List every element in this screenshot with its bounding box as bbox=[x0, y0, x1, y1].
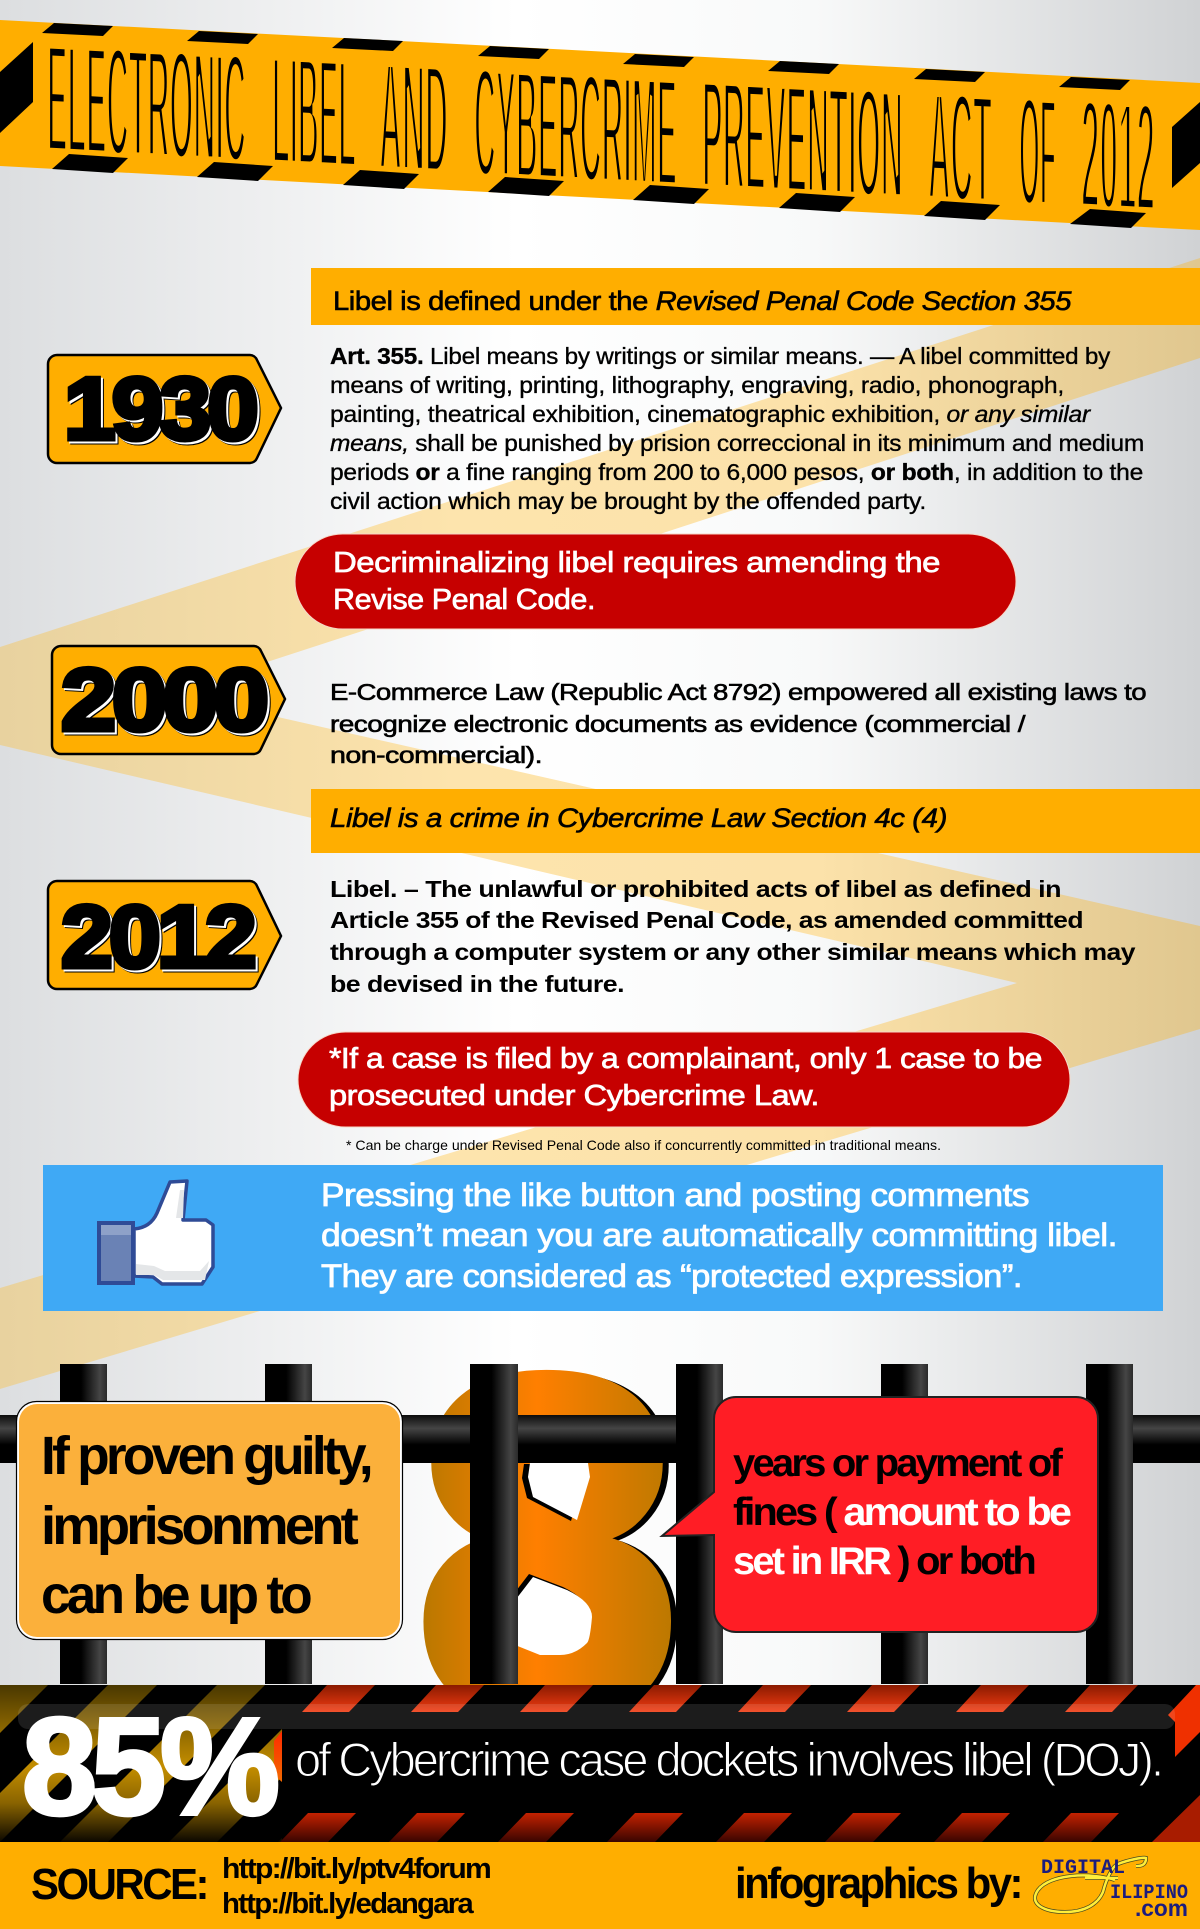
callout: only one case: prosecuted under Cybercrime Law. bbox=[329, 1080, 819, 1112]
callout: decriminalizing libel bbox=[295, 534, 1016, 629]
sign: if proven guilty bbox=[16, 1402, 402, 1640]
badge: 2012: 2012 bbox=[63, 889, 256, 988]
text: e-commerce law bbox=[330, 679, 1146, 768]
number 8: 8 bbox=[412, 1272, 682, 1820]
callout: only one case bbox=[298, 1032, 1070, 1127]
section bar: revised penal code bbox=[311, 268, 1200, 325]
source links: http://bit.ly/edangara bbox=[222, 1888, 475, 1920]
text: article 355: means, shall be punished by prision correccional in its minimum and medium bbox=[330, 430, 1144, 456]
text: article 355: civil action which may be brought by the offended party. bbox=[330, 488, 926, 514]
badge: 1930: 1930 bbox=[64, 359, 256, 458]
badge: 2000: 2000 bbox=[63, 652, 268, 751]
section bar: revised penal code: Libel is defined under the Revised Penal Code Section 355 bbox=[333, 286, 1073, 316]
title: LIBEL bbox=[272, 20, 356, 204]
badge: 2012: 2012 bbox=[61, 887, 254, 986]
number 8: 8 bbox=[418, 1274, 688, 1822]
text: protected expression: They are considered as “protected expression”. bbox=[321, 1258, 1022, 1294]
logo: digital filipino: DIGITAL bbox=[1041, 1857, 1125, 1880]
speech bubble: years or payment bbox=[662, 1397, 1098, 1632]
callout: decriminalizing libel: Revise Penal Code. bbox=[333, 584, 595, 616]
text: article 355 bbox=[330, 343, 1144, 514]
text: article 355: painting, theatrical exhibition, cinematographic exhibition, or any similar bbox=[330, 401, 1092, 427]
source links bbox=[222, 1853, 490, 1920]
text: e-commerce law: non-commercial). bbox=[330, 742, 542, 768]
sign: if proven guilty: If proven guilty, bbox=[41, 1426, 371, 1486]
panel: like button bbox=[43, 1165, 1163, 1311]
speech bubble: years or payment: set in IRR ) or both bbox=[733, 1540, 1035, 1583]
statistic band bbox=[0, 1685, 1200, 1844]
source links: http://bit.ly/ptv4forum bbox=[222, 1853, 490, 1885]
footer bbox=[0, 1842, 1200, 1929]
callout: only one case: *If a case is filed by a complainant, only 1 case to be bbox=[329, 1043, 1042, 1075]
title: AND bbox=[379, 26, 448, 209]
text: article 355: means of writing, printing, lithography, engraving, radio, phonograph, bbox=[330, 372, 1064, 398]
text: cybercrime libel definition: Article 355 of the Revised Penal Code, as amended committed bbox=[330, 907, 1083, 933]
text: protected expression: Pressing the like button and posting comments bbox=[321, 1177, 1029, 1213]
text: case dockets: of Cybercrime case dockets involves libel (DOJ). bbox=[295, 1733, 1161, 1786]
source label: SOURCE: bbox=[31, 1860, 207, 1909]
logo: digital filipino bbox=[1035, 1857, 1188, 1921]
badge: 1930: 1930 bbox=[66, 361, 258, 460]
title: ELECTRONIC bbox=[47, 8, 246, 198]
text: cybercrime libel definition: be devised in the future. bbox=[330, 971, 624, 997]
text: article 355: periods or a fine ranging from 200 to 6,000 pesos, or both, in addition to the bbox=[330, 459, 1143, 485]
badge: 1930: 1930 bbox=[67, 362, 259, 461]
logo: digital filipino: .com bbox=[1135, 1895, 1188, 1921]
text: protected expression bbox=[321, 1177, 1117, 1294]
badge: 2000: 2000 bbox=[61, 650, 266, 749]
text: cybercrime libel definition bbox=[330, 876, 1136, 997]
badge: 2000: 2000 bbox=[64, 653, 269, 752]
text: protected expression: doesn’t mean you are automatically committing libel. bbox=[321, 1217, 1117, 1253]
text: cybercrime libel definition: through a computer system or any other similar means which may bbox=[330, 939, 1136, 965]
sign: if proven guilty: imprisonment bbox=[41, 1496, 359, 1556]
text: article 355: Art. 355. Libel means by writings or similar means. — A libel committed by bbox=[330, 343, 1111, 369]
stat: 85 percent: 85% bbox=[22, 1690, 277, 1844]
logo: digital filipino: ILIPINO bbox=[1110, 1882, 1188, 1905]
section bar: cybercrime law bbox=[311, 789, 1200, 853]
section bar: cybercrime law: Libel is a crime in Cybercrime Law Section 4c (4) bbox=[330, 803, 947, 833]
jail bars with number 8 bbox=[0, 1272, 1200, 1822]
sign: if proven guilty: can be up to bbox=[41, 1565, 311, 1625]
speech bubble: years or payment: fines ( amount to be bbox=[733, 1491, 1071, 1534]
icon: thumbs up bbox=[99, 1181, 213, 1284]
speech bubble: years or payment: years or payment of bbox=[733, 1442, 1064, 1485]
zigzag caution beam bbox=[0, 258, 1200, 1389]
text: cybercrime libel definition: Libel. – The unlawful or prohibited acts of libel as defined in bbox=[330, 876, 1061, 902]
title tape bbox=[0, 8, 1200, 247]
credit: infographics by: bbox=[735, 1859, 1021, 1908]
text: e-commerce law: recognize electronic documents as evidence (commercial / bbox=[330, 711, 1026, 737]
badge: 2012: 2012 bbox=[64, 890, 257, 989]
footnote: * Can be charge under Revised Penal Code also if concurrently committed in traditional means. bbox=[346, 1137, 941, 1153]
text: e-commerce law: E-Commerce Law (Republic Act 8792) empowered all existing laws to bbox=[330, 679, 1146, 705]
callout: decriminalizing libel: Decriminalizing libel requires amending the bbox=[333, 547, 940, 579]
